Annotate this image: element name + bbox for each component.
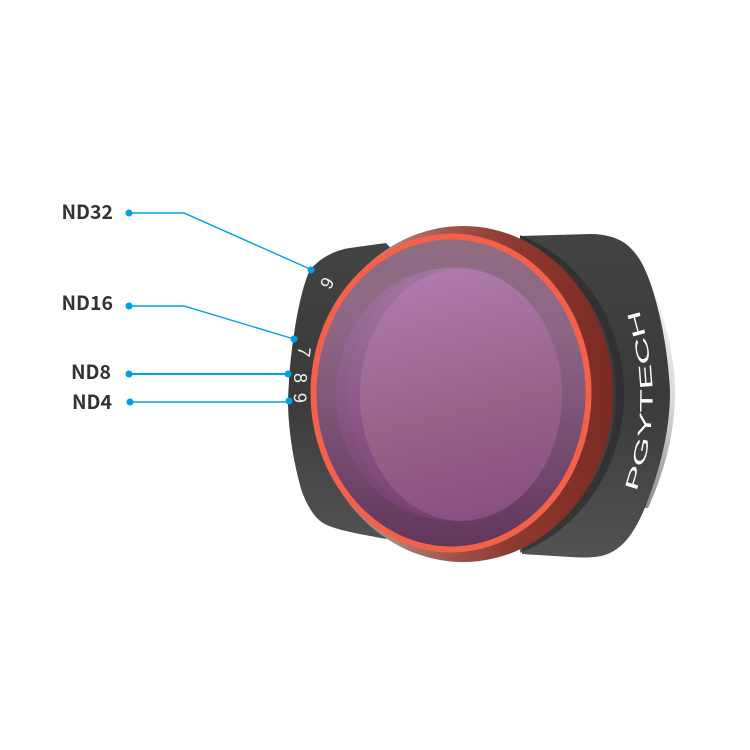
dial numbers: 9 [290,392,310,404]
callout: ND32 [61,196,314,274]
right body silver edge [640,280,675,508]
callout: ND16: ND16 [61,287,113,316]
filter product: PGYTECH [625,312,653,489]
body inner shadow [520,235,624,553]
callout: ND8 [71,356,292,385]
callout: ND32: ND32 [61,196,113,225]
callout: ND8: ND8 [71,356,111,385]
orange ring [310,234,592,552]
left body [288,243,420,539]
filter product [288,226,675,562]
glass inner disc [360,269,562,521]
dial numbers: 7 [293,346,315,358]
callout: ND4 [72,386,292,415]
glass inner ring [348,267,562,521]
dial numbers: 8 [290,373,310,383]
callout: ND4: ND4 [72,386,112,415]
infographic: PGYTECH variable ND filter [63,204,675,562]
dial numbers [290,274,338,404]
callout: ND16 [61,287,298,342]
right body [520,234,670,558]
glass inner ring outer [336,268,562,520]
brand logo [636,308,653,492]
glass [316,240,586,546]
outer red ring [313,226,613,562]
dial numbers: 6 [316,274,338,292]
